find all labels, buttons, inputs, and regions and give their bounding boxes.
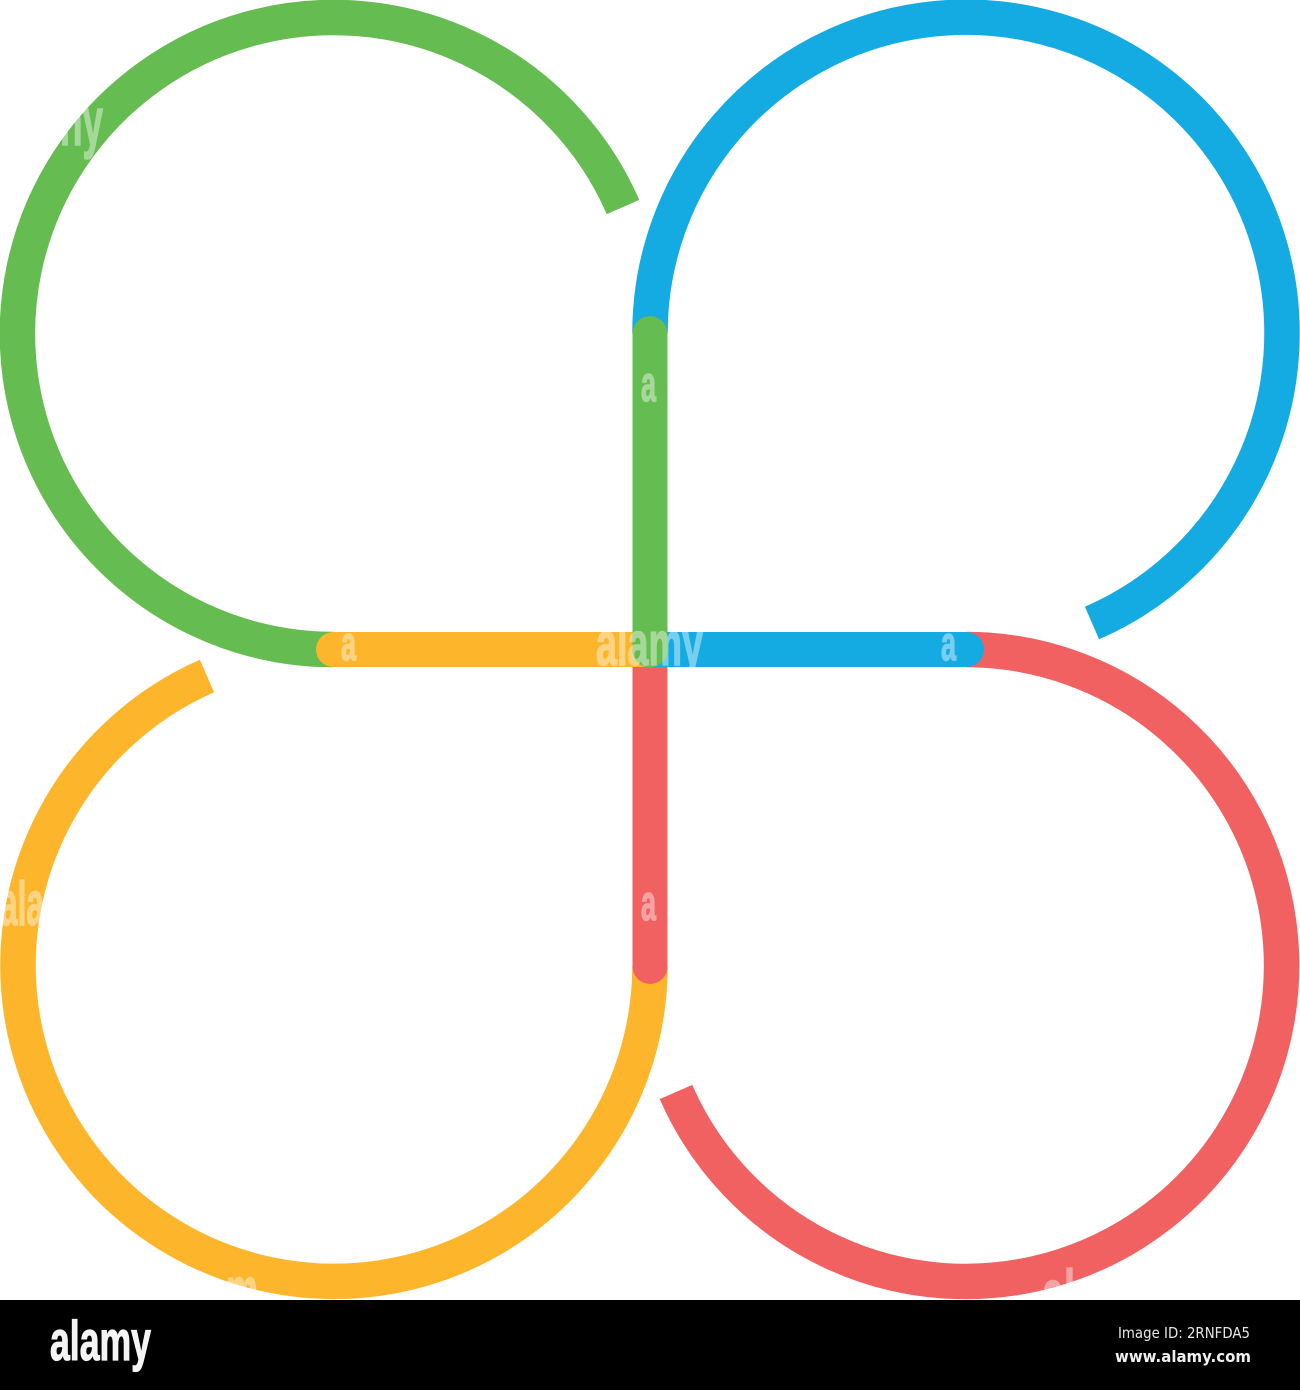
- yellow loop arc: [18, 676, 650, 1281]
- image id: Image ID: 2RNFDA5: [1118, 1324, 1250, 1342]
- watermark fragments: al: [1042, 1256, 1075, 1330]
- red loop arc: [676, 650, 1282, 1281]
- watermark fragments: a: [341, 618, 356, 671]
- website: www.alamy.com: [1115, 1347, 1251, 1366]
- watermark fragments: a: [641, 875, 657, 931]
- watermark fragments: a: [641, 356, 657, 412]
- footer bar: [0, 1300, 1300, 1390]
- green loop arc: [17, 18, 623, 650]
- watermark fragments: m: [226, 1253, 258, 1327]
- footer logo: alamy: [50, 1309, 151, 1372]
- watermark fragments: ny: [60, 84, 103, 160]
- blue horizontal stem: [650, 632, 966, 667]
- yellow horizontal stem: [334, 632, 650, 667]
- green vertical stem: [632, 334, 668, 650]
- watermark fragments: a: [941, 618, 956, 671]
- watermark fragments: alamy: [596, 610, 703, 679]
- watermark fragments: ala: [0, 870, 44, 939]
- watermark fragments: [0, 84, 1075, 1330]
- blue loop arc: [650, 17, 1282, 623]
- red vertical stem: [632, 650, 668, 966]
